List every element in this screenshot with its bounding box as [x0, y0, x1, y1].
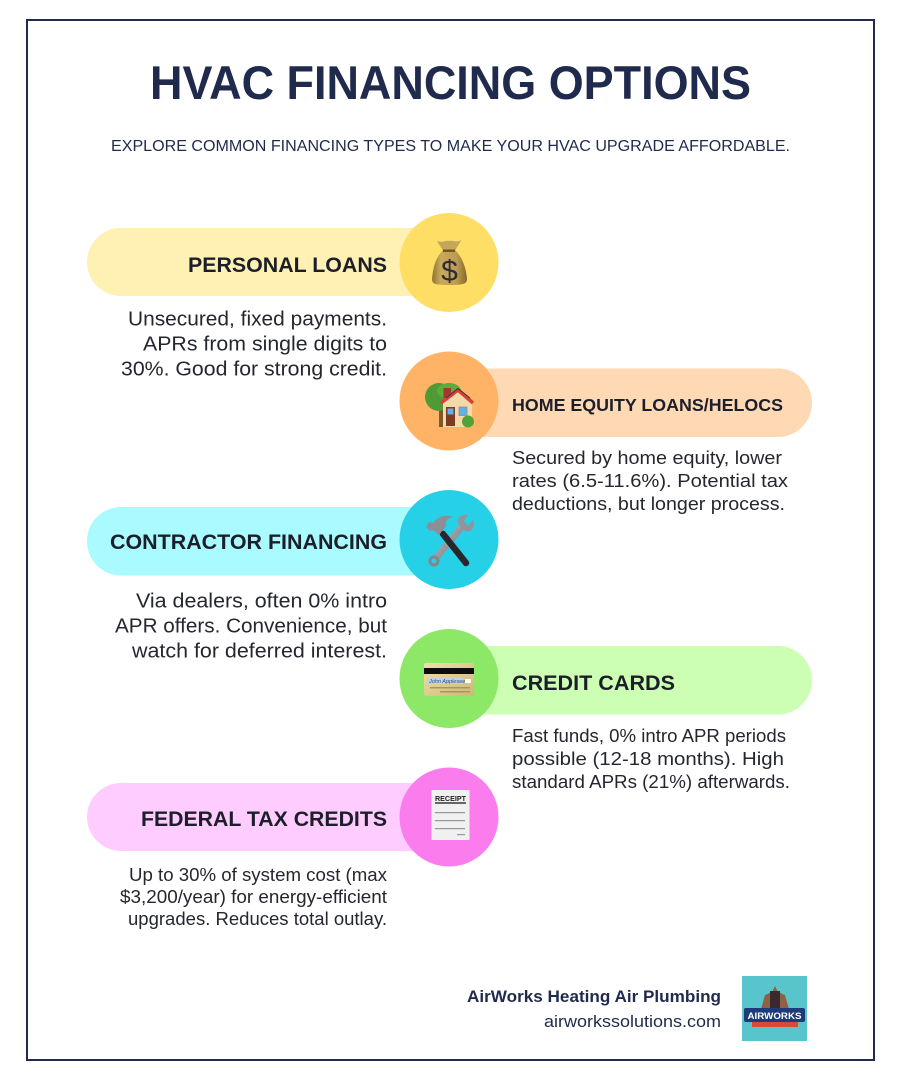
icon: money bag — [432, 240, 467, 288]
panel: credit cards — [400, 629, 812, 792]
footer brand text: AirWorks Heating Air Plumbing — [467, 988, 721, 1006]
text: contractor description — [115, 590, 387, 662]
text: federal tax credits description: upgrades. Reduces total outlay. — [128, 908, 387, 929]
text: personal loans description: APRs from single digits to — [143, 334, 387, 356]
icon: hammer and wrench — [426, 515, 474, 565]
panel: contractor financing — [87, 490, 498, 662]
text: federal tax credits description: $3,200/year) for energy-efficient — [120, 886, 387, 907]
footer brand text — [467, 988, 721, 1031]
panel: home equity loans — [400, 352, 812, 514]
text: federal tax credits description — [120, 864, 388, 929]
icon: money bag: $ — [441, 255, 458, 288]
text: home equity description — [512, 447, 789, 514]
heading: home equity: HOME EQUITY LOANS/HELOCS — [512, 395, 783, 415]
text: home equity description: deductions, but longer process. — [512, 493, 785, 514]
text: contractor description: APR offers. Convenience, but — [115, 616, 387, 638]
title: HVAC FINANCING OPTIONS — [150, 56, 751, 109]
text: contractor description: watch for deferred interest. — [131, 640, 387, 662]
text: personal loans description — [121, 308, 387, 380]
panel: federal tax credits — [87, 768, 498, 929]
footer logo — [742, 976, 807, 1041]
panel: personal loans — [87, 213, 498, 380]
text: credit cards description — [512, 725, 790, 792]
heading: credit cards: CREDIT CARDS — [512, 672, 675, 695]
text: personal loans description: 30%. Good for strong credit. — [121, 358, 387, 380]
text: federal tax credits description: Up to 30% of system cost (max — [129, 864, 388, 885]
text: personal loans description: Unsecured, fixed payments. — [128, 308, 387, 330]
text: credit cards description: standard APRs (21%) afterwards. — [512, 771, 790, 792]
heading: federal tax credits: FEDERAL TAX CREDITS — [141, 808, 387, 831]
icon: receipt — [432, 790, 470, 840]
text: home equity description: Secured by home equity, lower — [512, 447, 782, 468]
heading: contractor financing: CONTRACTOR FINANCING — [110, 531, 387, 554]
subtitle: EXPLORE COMMON FINANCING TYPES TO MAKE YOUR HVAC UPGRADE AFFORDABLE. — [111, 138, 790, 155]
icon: receipt: RECEIPT — [435, 794, 466, 803]
icon: house with tree — [425, 383, 474, 428]
text: credit cards description: possible (12-18 months). High — [512, 748, 784, 769]
text: contractor description: Via dealers, often 0% intro — [136, 590, 387, 612]
footer logo: AIRWORKS — [748, 1011, 802, 1022]
heading: personal loans: PERSONAL LOANS — [188, 254, 387, 277]
icon: credit card — [424, 663, 474, 696]
text: credit cards description: Fast funds, 0% intro APR periods — [512, 725, 786, 746]
text: home equity description: rates (6.5-11.6%). Potential tax — [512, 470, 789, 491]
icon: credit card: John Appleseed — [428, 679, 469, 685]
footer brand text: airworkssolutions.com — [544, 1013, 721, 1031]
